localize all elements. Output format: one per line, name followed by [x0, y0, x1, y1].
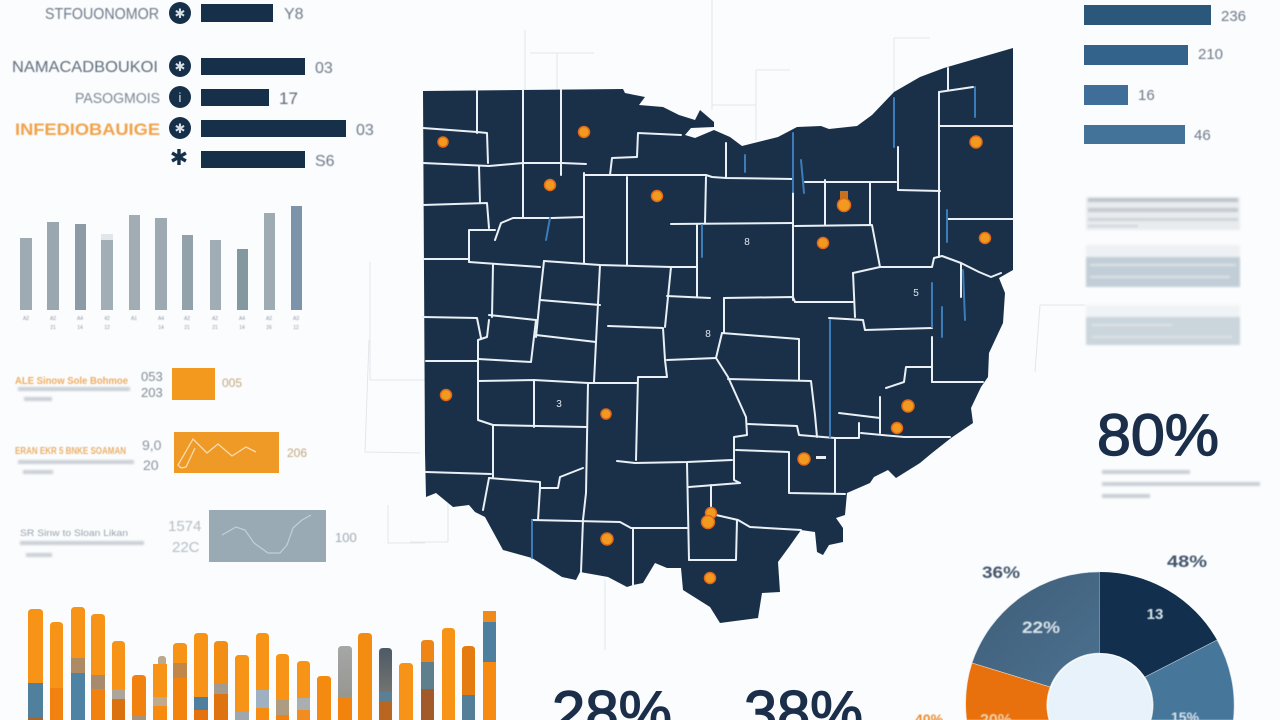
row 5 value: S6	[315, 153, 335, 170]
row 3 label: PASOGMOIS	[75, 90, 160, 107]
bar axis labels: 26	[266, 325, 272, 331]
donut labels: 22%	[1022, 618, 1060, 637]
bar axis labels: 21	[184, 325, 190, 331]
row 4 bar	[201, 120, 346, 137]
stat 3 sparkline	[222, 515, 311, 553]
row 3 icon: i	[179, 90, 182, 105]
stat 1 numbers: 053	[141, 369, 163, 384]
bar axis labels: A2	[212, 316, 218, 322]
text block 1	[1086, 197, 1240, 230]
bar axis labels: A4	[77, 316, 83, 322]
row 5 icon: ✱	[170, 145, 188, 170]
stat 3 numbers: 1574	[168, 518, 201, 535]
map digits: 8	[705, 329, 711, 340]
stat 2 numbers	[142, 437, 162, 473]
bar values: 236	[1221, 8, 1246, 25]
bar axis labels: 14	[239, 325, 245, 331]
row 1 value: Y8	[284, 6, 304, 23]
grey vertical bar chart	[20, 206, 302, 331]
stat 3 description	[20, 541, 144, 557]
stat row 3: grey sparkline	[20, 510, 357, 562]
right text blocks	[1086, 197, 1240, 345]
river lines	[546, 87, 975, 437]
bar axis labels: A2	[184, 316, 190, 322]
row 1 bar	[201, 4, 273, 22]
bar values: 46	[1194, 127, 1211, 144]
stat 3 value: 100	[335, 530, 357, 545]
bar axis labels: A1	[131, 316, 137, 322]
bar axis labels: 21	[50, 325, 56, 331]
row 3 value: 17	[279, 89, 298, 108]
row 4 value: 03	[356, 122, 374, 139]
row 2 icon: ✱	[175, 59, 186, 74]
row 1 icon	[169, 2, 191, 24]
row 1 icon: ✱	[175, 6, 186, 21]
stat 2 value: 206	[287, 446, 307, 460]
stat row 1: orange block	[15, 368, 242, 401]
location markers	[438, 126, 990, 584]
donut labels	[915, 552, 1207, 720]
stat 1 block	[172, 368, 215, 400]
bar axis labels: 14	[77, 325, 83, 331]
bar axis labels: A4	[239, 316, 245, 322]
bar axis labels: A3	[293, 316, 299, 322]
row 3 icon	[169, 86, 191, 108]
stat 2 sparkline	[178, 439, 256, 468]
bar axis labels: 12	[293, 325, 299, 331]
stat 2 label: ERAN EKR 5 BNKE SOAMAN	[15, 446, 126, 457]
bar axis labels: 21	[212, 325, 218, 331]
row 4 icon	[169, 117, 191, 139]
row 5 bar	[201, 151, 305, 168]
row 1 label: STFOUONOMOR	[45, 6, 159, 23]
stat 3 block	[209, 510, 326, 562]
description	[1102, 470, 1260, 498]
bar axis labels: A4	[158, 316, 164, 322]
stat 3 numbers: 22C	[172, 539, 200, 556]
donut chart	[915, 552, 1234, 720]
row 4 icon: ✱	[175, 121, 186, 136]
map digits: 3	[556, 399, 562, 410]
row 2 label: NAMACADBOUKOI	[12, 59, 158, 76]
stat row 2: orange sparkline	[15, 432, 307, 474]
bar axis labels: 14	[158, 325, 164, 331]
bar axis labels: A2	[23, 316, 29, 322]
row 2 bar	[201, 58, 305, 75]
80 percent callout	[1097, 403, 1260, 498]
stat 1 description	[18, 387, 130, 401]
map silhouette	[423, 48, 1013, 623]
stacked orange bar chart	[28, 607, 496, 720]
row 3 bar	[201, 89, 269, 106]
bars	[28, 607, 496, 720]
donut centre	[1048, 654, 1152, 720]
text block 2	[1086, 245, 1240, 287]
county boundaries	[423, 68, 1013, 585]
row 2 icon	[169, 55, 191, 77]
bar axis labels: 12	[104, 325, 110, 331]
bar axis labels: A2	[266, 316, 272, 322]
donut labels: 13	[1147, 606, 1163, 623]
text block 3	[1086, 305, 1240, 345]
row 4 label: INFEDIOBAUIGE	[15, 120, 160, 139]
stat 1 value: 005	[222, 376, 242, 390]
stat 2 numbers: 9,0	[142, 437, 162, 453]
stat 2 numbers: 20	[143, 457, 159, 473]
stat 1 numbers: 203	[141, 385, 163, 400]
donut labels: 36%	[982, 563, 1020, 582]
big percentage: 80%	[1097, 403, 1219, 468]
map digits: 5	[913, 288, 919, 299]
leader lines around the map	[365, 0, 1085, 650]
map digits: 8	[744, 237, 750, 248]
bar axis labels: A2	[50, 316, 56, 322]
bar values: 210	[1198, 46, 1223, 63]
map of counties	[423, 48, 1013, 623]
donut labels: 48%	[1167, 552, 1207, 571]
top-right horizontal bar chart	[1084, 5, 1246, 144]
stat 3 numbers	[168, 518, 201, 556]
bar axis labels	[23, 316, 299, 331]
bar axis labels: 42	[104, 316, 110, 322]
stat 1 label: ALE Sinow Sole Bohmoe	[15, 376, 128, 387]
stat 3 label: SR Sinw to Sloan Likan	[20, 528, 128, 538]
bar values: 16	[1138, 87, 1155, 104]
stat 1 numbers	[141, 369, 163, 400]
bar values	[1138, 8, 1246, 144]
row 2 value: 03	[315, 60, 333, 77]
stat 2 block	[174, 432, 279, 473]
map digits	[556, 237, 919, 410]
top-left horizontal bar chart	[12, 2, 374, 170]
stat 2 description	[18, 460, 134, 474]
